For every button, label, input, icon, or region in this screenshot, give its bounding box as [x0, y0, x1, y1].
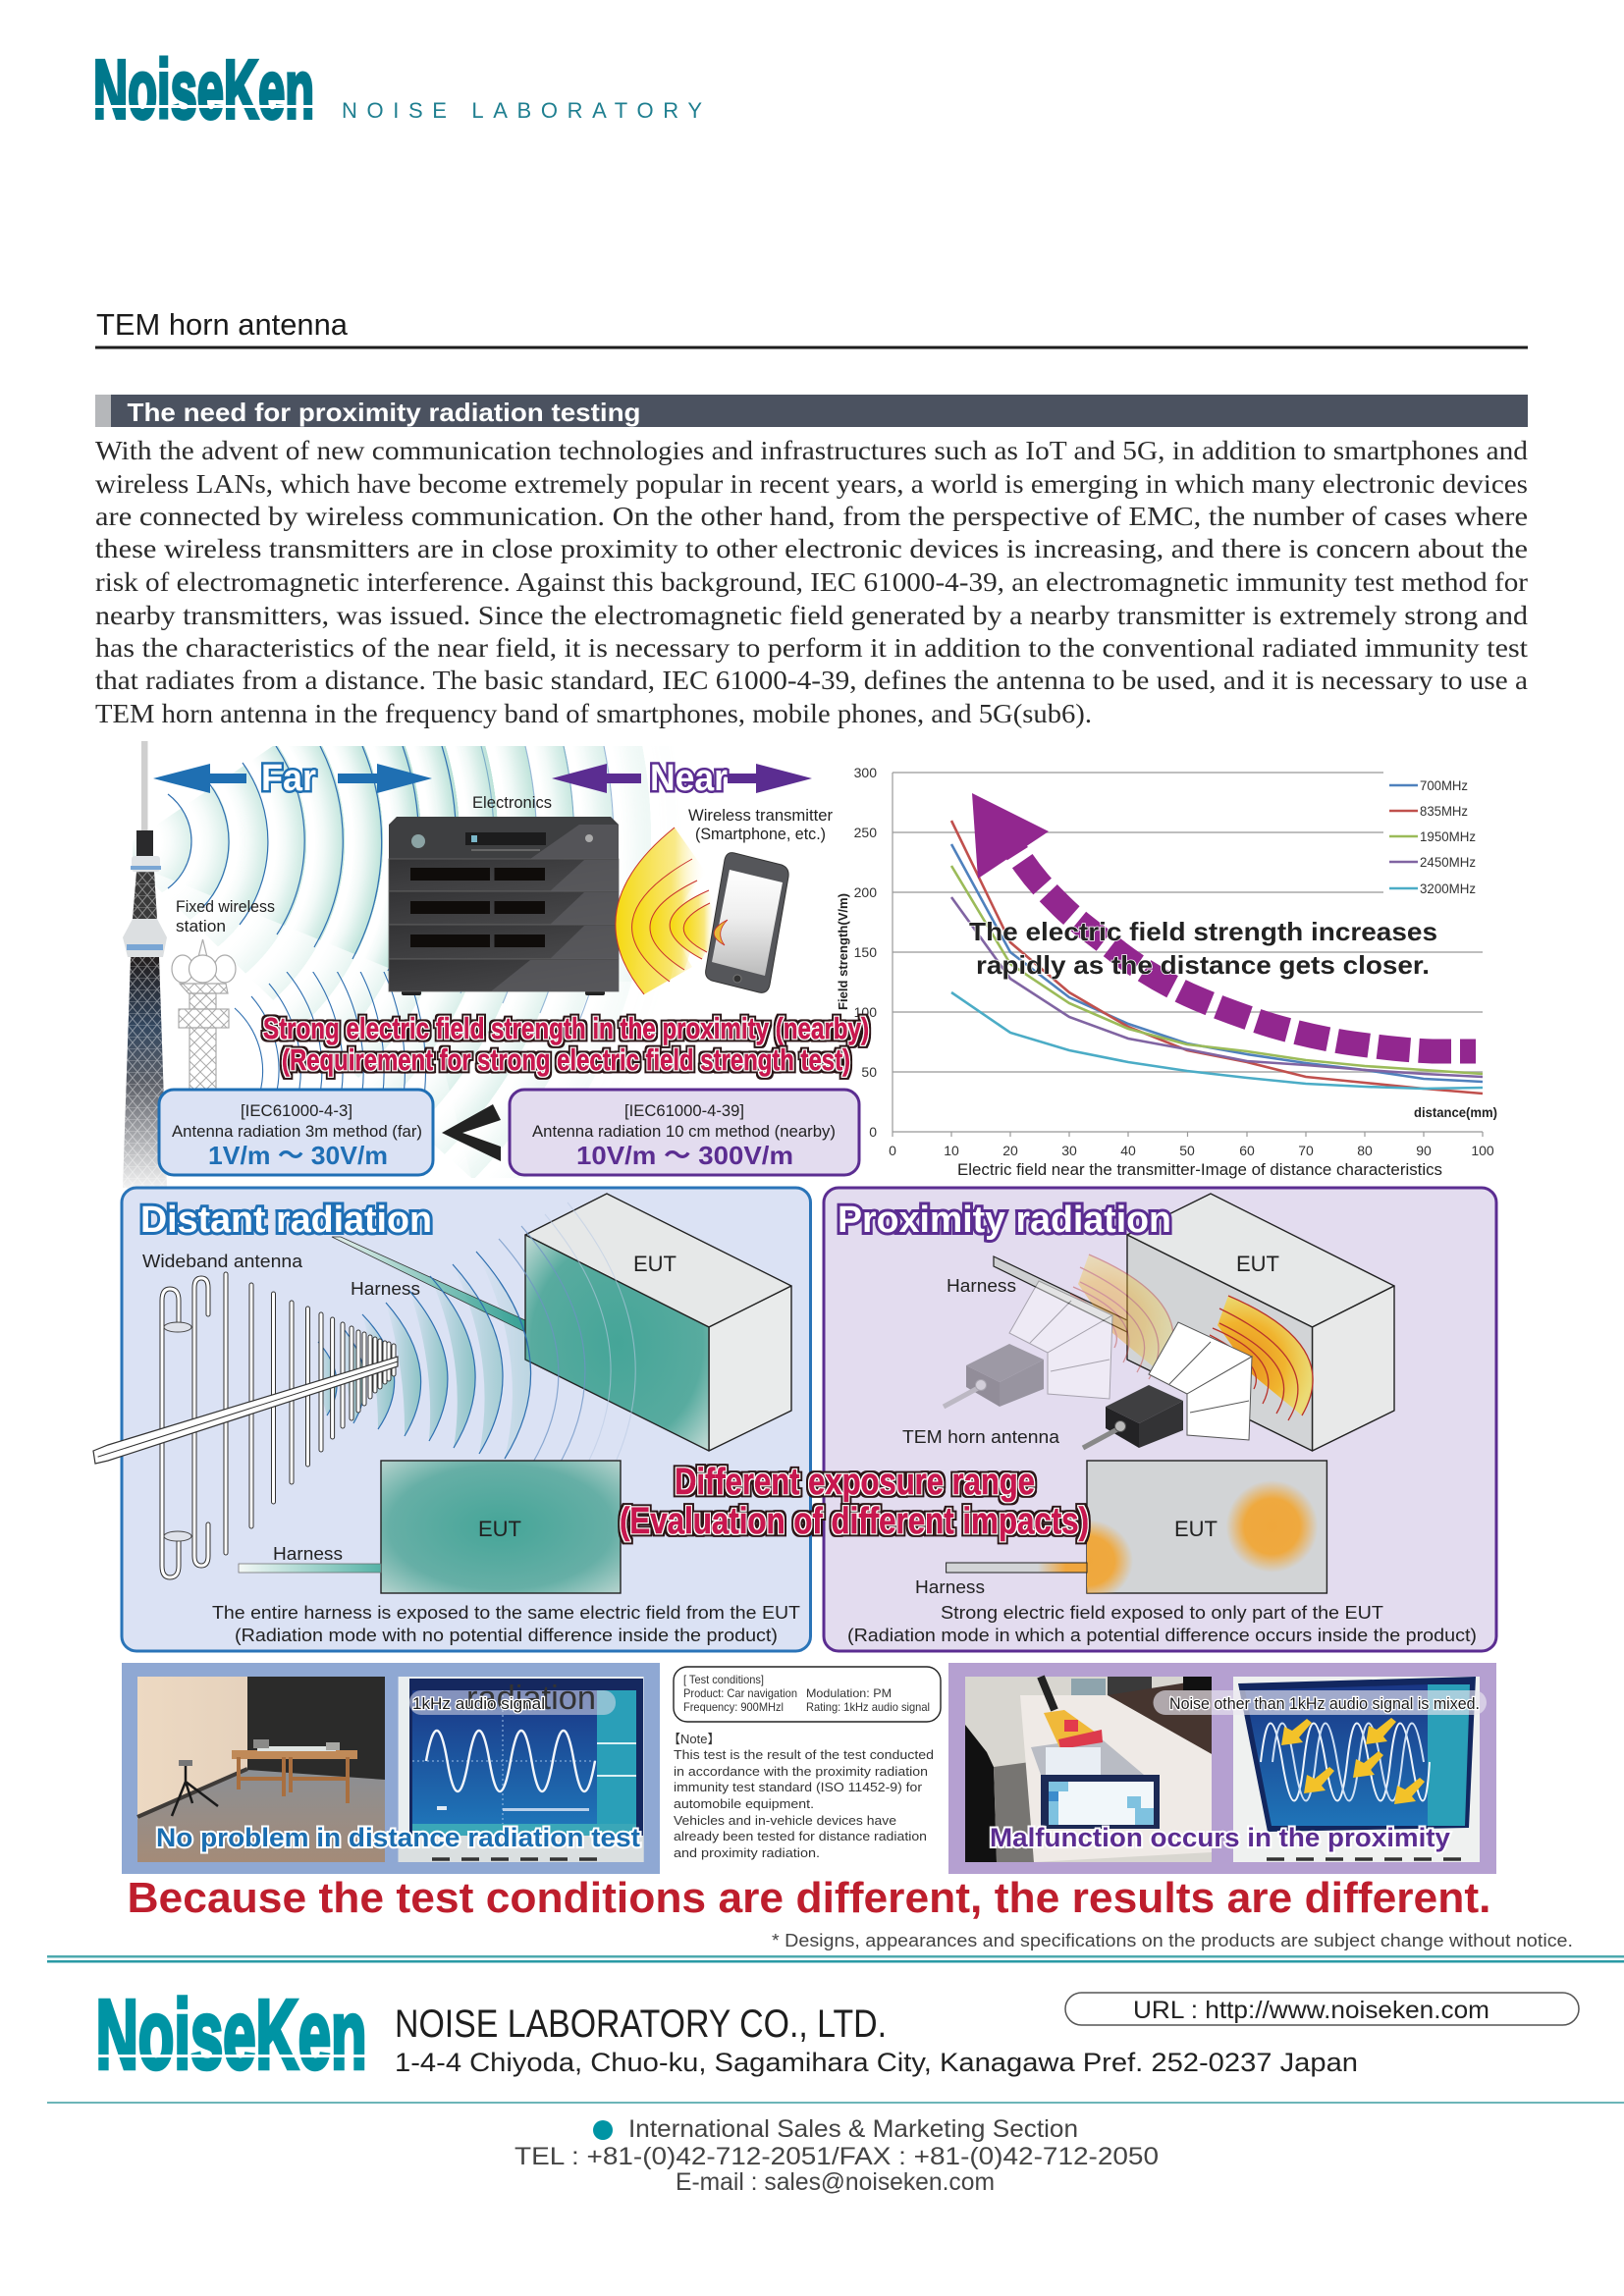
test conditions box: [ Test conditions] — [683, 1673, 764, 1686]
phone and fax: TEL : +81-(0)42-712-2051/FAX : +81-(0)42-712-2050 — [514, 2143, 1159, 2170]
data series — [951, 821, 1483, 1094]
ghost TEM horn — [944, 1255, 1173, 1407]
test conditions box: Modulation: PM — [806, 1686, 892, 1700]
overlay: pale pill — [409, 1690, 616, 1715]
URL pill — [1065, 1993, 1579, 2025]
icon: yellow near-field waves — [616, 828, 715, 994]
x axis tick labels: 30 — [1061, 1143, 1077, 1158]
section name: International Sales & Marketing Section — [628, 2115, 1078, 2143]
photo: oscilloscope with noise — [1233, 1677, 1480, 1862]
test conditions box: Product: Car navigation — [683, 1686, 797, 1700]
company address: 1-4-4 Chiyoda, Chuo-ku, Sagamihara City, Kanagawa Pref. 252-0237 Japan — [395, 2048, 1358, 2077]
x axis tick labels: 0 — [889, 1143, 896, 1158]
email: E-mail : sales@noiseken.com — [676, 2168, 995, 2196]
photo: proximity setup — [965, 1677, 1212, 1862]
label: EUT: EUT — [633, 1252, 677, 1276]
x axis tick labels: 90 — [1416, 1143, 1432, 1158]
label: wireless transmitter — [688, 806, 833, 843]
label: Electronics: Electronics — [472, 793, 552, 812]
EUT front view — [381, 1461, 621, 1593]
label: harness: Harness — [273, 1544, 343, 1564]
caption: (Radiation mode with no potential difference inside the product) — [235, 1626, 778, 1645]
note text: and proximity radiation. — [674, 1845, 820, 1860]
caption — [847, 1603, 1477, 1645]
y axis tick labels: 0 — [869, 1124, 877, 1140]
intro paragraph: that radiates from a distance. The basic standard, IEC 61000-4-39, defines the antenna to be used, and it is necessary to use a — [95, 666, 1528, 695]
panel: IEC61000-4-39 near box: 10V/m ～ 300V/m — [576, 1141, 793, 1170]
Near arrows: Near — [650, 758, 728, 799]
x axis tick labels: 50 — [1179, 1143, 1195, 1158]
icon: electronics stack — [389, 817, 619, 995]
intro paragraph: With the advent of new communication technologies and infrastructures such as IoT and 5G, in addition to smartphones and — [95, 436, 1529, 465]
result: malfunction: Malfunction occurs in the proximity — [990, 1823, 1450, 1852]
legend: 700MHz — [1420, 777, 1468, 793]
arrow: dashed curved purple — [972, 793, 1476, 1051]
harness front view — [239, 1564, 381, 1573]
header tagline: NOISE LABORATORY — [342, 98, 702, 123]
x axis tick labels: 80 — [1357, 1143, 1373, 1158]
harness — [994, 1256, 1127, 1332]
intro paragraph: these wireless transmitters are in close proximity to other electronic devices is increasing, and there is concern about the — [95, 534, 1528, 563]
EUT 3D box — [1127, 1194, 1394, 1451]
chart callout text — [969, 917, 1437, 980]
icon: fixed wireless tower — [172, 939, 236, 1092]
label: harness: Harness — [915, 1577, 985, 1597]
label: EUT: EUT — [1236, 1252, 1279, 1276]
y axis tick labels: 50 — [861, 1064, 877, 1080]
panel: IEC61000-4-39 near box — [510, 1090, 859, 1175]
y axis title: Field strength(V/m) — [836, 893, 850, 1010]
result: no problem: No problem in distance radiation test — [156, 1823, 640, 1852]
waves from antenna — [317, 1202, 635, 1482]
Far arrows: Far — [261, 758, 316, 799]
intro paragraph: nearby transmitters, was issued. Since the electromagnetic field generated by a nearby transmitter is extremely strong and — [95, 601, 1529, 630]
intro paragraph: are connected by wireless communication. On the other hand, from the perspective of EMC, the number of cases where — [95, 502, 1528, 531]
y axis tick labels — [854, 765, 877, 1140]
intro paragraph: TEM horn antenna in the frequency band of smartphones, mobile phones, and 5G(sub6). — [95, 699, 1092, 728]
EUT front view with hot spots — [1086, 1460, 1327, 1594]
legend — [1385, 771, 1484, 896]
label: fixed wireless station: Fixed wireless — [176, 897, 275, 916]
legend: 3200MHz — [1420, 881, 1476, 896]
label: wireless transmitter: (Smartphone, etc.) — [695, 825, 826, 843]
note text: immunity test standard (ISO 11452-9) for — [674, 1780, 923, 1794]
test conditions box — [674, 1667, 941, 1722]
panel: proximity test results — [948, 1663, 1496, 1874]
illustration: far/near radiation — [123, 741, 872, 1188]
Near arrows — [552, 758, 812, 799]
test conditions box: Rating: 1kHz audio signal — [806, 1700, 930, 1714]
icon: wideband antenna — [93, 1274, 398, 1577]
footer logo — [90, 1980, 373, 2090]
headline: strong electric field: (Requirement for strong electric field strength test) — [282, 1042, 850, 1077]
note text: Vehicles and in-vehicle devices have — [674, 1813, 896, 1828]
legend: 1950MHz — [1420, 828, 1476, 844]
headline: strong electric field: Strong electric field strength in the proximity (nearby) — [263, 1011, 869, 1045]
y axis tick labels: 250 — [854, 825, 877, 840]
panel: IEC61000-4-3 far box — [159, 1090, 433, 1175]
x axis tick labels: 20 — [1002, 1143, 1018, 1158]
label: EUT: EUT — [478, 1517, 521, 1541]
caption — [212, 1603, 800, 1645]
title: Proximity radiation: Proximity radiation — [838, 1200, 1171, 1241]
headline: different exposure range: (Evaluation of different impacts) — [620, 1501, 1089, 1542]
x axis tick labels: 60 — [1239, 1143, 1255, 1158]
label: TEM horn antenna: TEM horn antenna — [902, 1427, 1060, 1447]
label: noise: Noise other than 1kHz audio signal is mixed. — [1169, 1694, 1480, 1713]
note text: This test is the result of the test conducted — [674, 1747, 934, 1762]
icon: bullet — [593, 2120, 613, 2140]
header logo — [88, 43, 320, 135]
panel: distance test results — [122, 1663, 660, 1874]
section heading bar — [95, 395, 1528, 427]
disclaimer: * Designs, appearances and specifications on the products are subject change without notice. — [772, 1931, 1573, 1950]
x axis tick labels: 40 — [1120, 1143, 1136, 1158]
section heading bar: The need for proximity radiation testing — [128, 398, 640, 427]
y axis tick labels: 200 — [854, 884, 877, 900]
conclusion headline: Because the test conditions are different, the results are different. — [128, 1874, 1491, 1922]
caption: Strong electric field exposed to only part of the EUT — [941, 1603, 1383, 1623]
URL pill: URL : http://www.noiseken.com — [1133, 1997, 1489, 2024]
line chart: field strength vs distance — [836, 765, 1497, 1179]
harness to EUT — [332, 1237, 525, 1332]
title rule — [95, 346, 1528, 349]
page title: TEM horn antenna — [96, 307, 349, 342]
legend: 2450MHz — [1420, 854, 1476, 870]
Far arrows — [153, 758, 432, 799]
icon: broadcast tower — [123, 741, 167, 1188]
x axis tick labels — [889, 1143, 1494, 1158]
overlay: pale pill — [1153, 1690, 1487, 1715]
y axis tick labels: 150 — [854, 944, 877, 960]
note text: 【Note】 — [668, 1732, 720, 1746]
intro paragraph — [95, 436, 1529, 728]
note text — [668, 1732, 934, 1860]
photo: oscilloscope normal — [399, 1677, 644, 1862]
intro paragraph: has the characteristics of the near field, it is necessary to perform it in addition to the conventional radiated immunity test — [95, 633, 1529, 663]
note text: in accordance with the proximity radiation — [674, 1764, 928, 1779]
panel: IEC61000-4-3 far box: [IEC61000-4-3] — [241, 1101, 352, 1120]
note text: automobile equipment. — [674, 1796, 814, 1811]
photo: test room — [137, 1677, 385, 1862]
greater-than sign — [442, 1104, 501, 1161]
chart callout text: The electric field strength increases — [969, 917, 1437, 946]
label: EUT: EUT — [1174, 1517, 1218, 1541]
label: wireless transmitter: Wireless transmitter — [688, 806, 833, 825]
icon: smartphone — [706, 853, 788, 992]
panel: IEC61000-4-3 far box: Antenna radiation 3m method (far) — [172, 1122, 422, 1141]
caption: (Radiation mode in which a potential difference occurs inside the product) — [847, 1626, 1477, 1645]
x axis title: distance(mm) — [1414, 1105, 1497, 1120]
label: harness: Harness — [351, 1279, 420, 1299]
y axis tick labels: 300 — [854, 765, 877, 780]
panel: IEC61000-4-39 near box: Antenna radiation 10 cm method (nearby) — [532, 1122, 836, 1141]
intro paragraph: risk of electromagnetic interference. Against this background, IEC 61000-4-39, an electromagnetic immunity test method for — [95, 567, 1528, 597]
chart caption: Electric field near the transmitter-Image of distance characteristics — [957, 1161, 1442, 1179]
label: harness: Harness — [947, 1276, 1016, 1296]
company name: NOISE LABORATORY CO., LTD. — [395, 2002, 887, 2046]
harness front view — [947, 1563, 1087, 1573]
TEM horn with near field — [1083, 1296, 1313, 1448]
footer logo: NoiseKen — [96, 1980, 367, 2090]
headline: strong electric field — [263, 1011, 869, 1077]
panel: proximity radiation — [824, 1188, 1496, 1651]
legend: 835MHz — [1420, 803, 1468, 819]
radio waves from tower — [133, 746, 651, 1178]
headline: different exposure range: Different exposure range — [675, 1462, 1035, 1503]
contact block — [514, 2115, 1159, 2196]
panel: distant radiation — [93, 1188, 811, 1651]
y axis tick labels: 100 — [854, 1004, 877, 1020]
header logo: NoiseKen — [93, 43, 314, 135]
note text: already been tested for distance radiation — [674, 1829, 927, 1843]
test conditions box: Frequency: 900MHzl — [683, 1700, 784, 1714]
x axis tick labels: 70 — [1298, 1143, 1314, 1158]
label: fixed wireless station: station — [176, 917, 226, 935]
label: wideband antenna: Wideband antenna — [142, 1252, 303, 1271]
EUT 3D box — [525, 1194, 791, 1451]
x axis tick labels: 10 — [944, 1143, 959, 1158]
x axis tick labels: 100 — [1471, 1143, 1494, 1158]
headline: different exposure range — [620, 1462, 1089, 1542]
panel: IEC61000-4-3 far box: 1V/m ～ 30V/m — [208, 1141, 388, 1170]
panel: IEC61000-4-39 near box: [IEC61000-4-39] — [624, 1101, 744, 1120]
title: Distant radiation: Distant radiation — [140, 1200, 432, 1241]
label: fixed wireless station — [176, 897, 275, 935]
intro paragraph: wireless LANs, which have become extremely popular in recent years, a world is emerging in which many electronic devices — [95, 469, 1528, 499]
chart callout text: rapidly as the distance gets closer. — [976, 950, 1430, 980]
stray label: radiation: radiation — [466, 1680, 596, 1717]
label: 1kHz audio signal: 1kHz audio signal — [412, 1694, 545, 1713]
caption: The entire harness is exposed to the same electric field from the EUT — [212, 1603, 800, 1623]
